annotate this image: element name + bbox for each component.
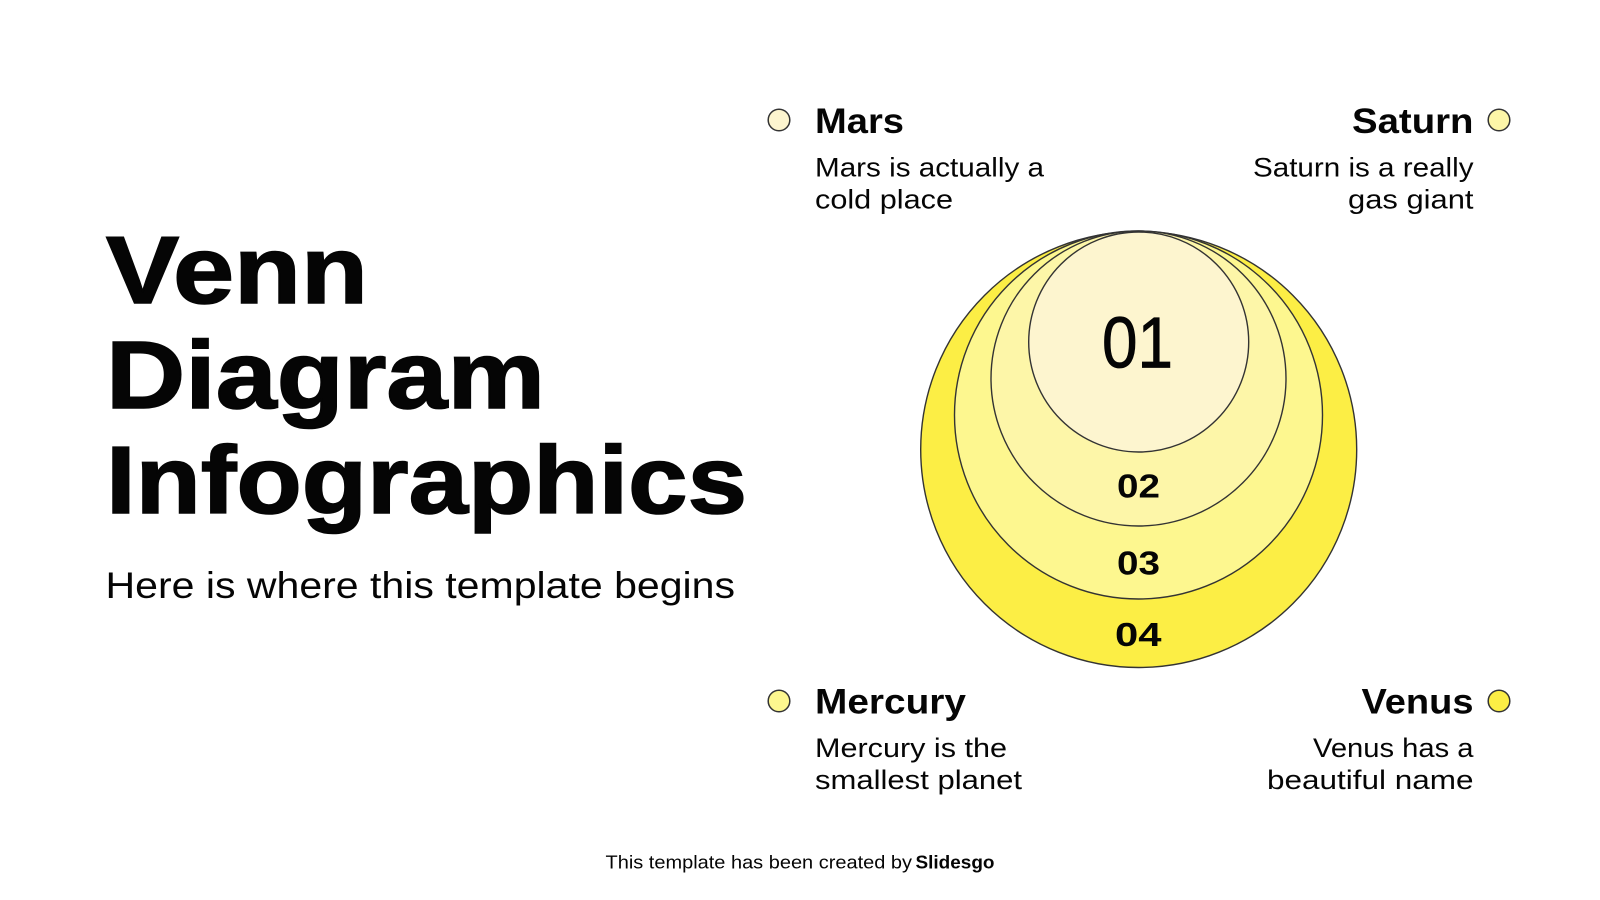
circle 01	[1029, 232, 1249, 452]
circle 03	[954, 231, 1322, 599]
footer credit: Slidesgo	[916, 851, 994, 872]
circle 04	[921, 232, 1357, 668]
text: Saturn description: gas giant	[1348, 184, 1474, 214]
title: Infographics	[106, 427, 747, 534]
circle 02	[991, 231, 1286, 526]
text: Mercury description: Mercury is the	[815, 733, 1007, 763]
icon: Mars dot	[768, 109, 790, 131]
subtitle: Here is where this template begins	[106, 565, 735, 606]
item: Mars	[768, 102, 1045, 214]
icon: Mercury dot	[768, 690, 790, 712]
text: Saturn description	[1253, 152, 1474, 214]
icon: Venus dot	[1488, 690, 1510, 712]
text: Mercury description: smallest planet	[815, 765, 1023, 795]
text: Venus description: Venus has a	[1313, 733, 1475, 763]
text: Venus description: beautiful name	[1267, 765, 1474, 795]
title block	[106, 217, 747, 606]
icon: Saturn dot	[1488, 109, 1510, 131]
title: Diagram	[106, 322, 545, 429]
number 04: 04	[1115, 616, 1162, 653]
number 01: 01	[1102, 304, 1173, 384]
item: Mercury	[768, 682, 1023, 795]
text: Mercury description	[815, 733, 1023, 795]
heading: Saturn: Saturn	[1352, 102, 1474, 141]
footer credit: This template has been created by	[606, 851, 913, 872]
item: Venus	[1267, 682, 1510, 795]
heading: Mercury: Mercury	[815, 682, 967, 722]
text: Mars description	[815, 152, 1045, 214]
text: Venus description	[1267, 733, 1475, 795]
number 03: 03	[1117, 544, 1160, 582]
title: Venn	[106, 217, 368, 324]
heading: Venus: Venus	[1362, 682, 1474, 722]
text: Mars description: Mars is actually a	[815, 152, 1045, 182]
number 02: 02	[1117, 467, 1160, 504]
venn diagram	[921, 231, 1357, 668]
item: Saturn	[1253, 102, 1510, 214]
text: Saturn description: Saturn is a really	[1253, 152, 1474, 182]
title	[106, 217, 747, 534]
heading: Mars: Mars	[815, 102, 904, 141]
text: Mars description: cold place	[815, 184, 953, 214]
